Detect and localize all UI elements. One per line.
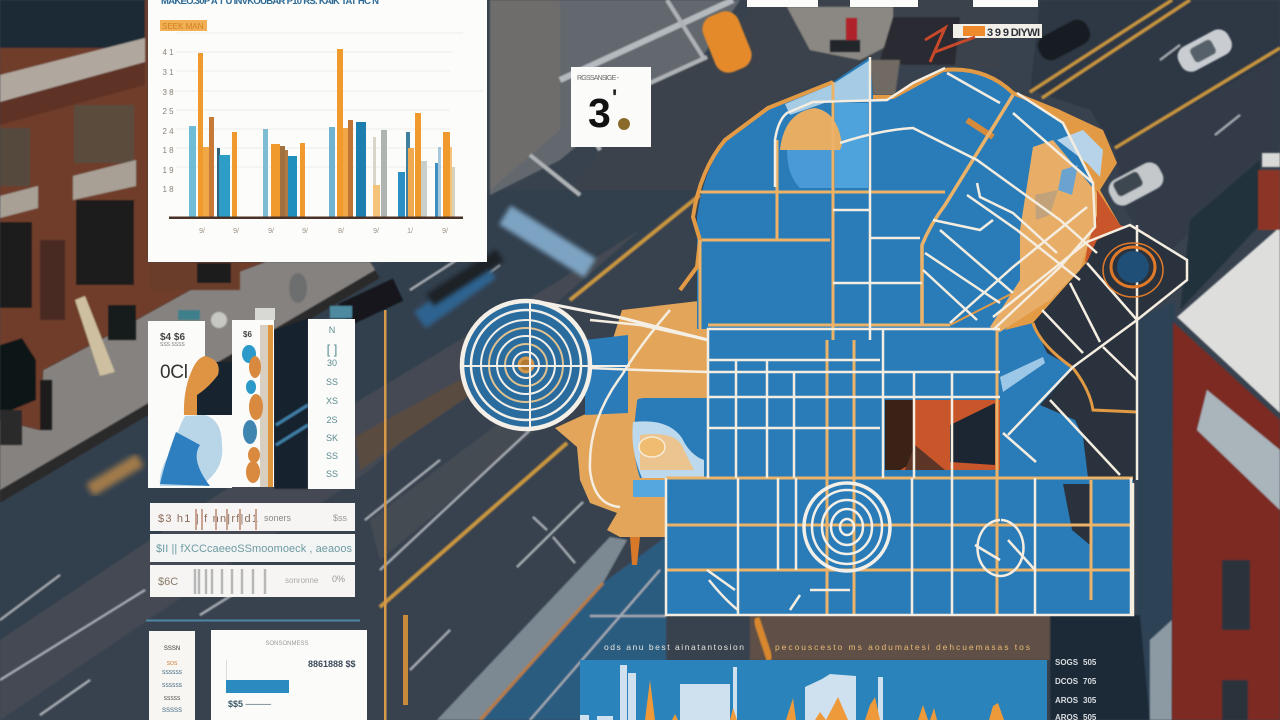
row 3: sonronne [285,576,319,585]
row 1: $ss [333,513,348,523]
blue bar [226,680,289,693]
x axis labels: 9/ [233,228,239,235]
orange vertical bar [403,615,408,705]
legend tag: SEEK MAN [162,22,204,31]
x axis labels: 9/ [302,228,308,235]
panel: illustration card B [232,308,275,487]
panel: icon list card C: SS [326,377,338,387]
map: street lines white [590,57,1187,615]
row 1: $3 h1 | f nn|rf|d1 [158,513,258,525]
x axis labels: 9/ [442,228,448,235]
map: district street map [462,57,1187,615]
map: bullseye target bottom [804,483,890,571]
x axis labels: 9/ [373,228,379,235]
panel: illustration card A: SSS SSSS [160,342,185,348]
panel: icon list card C: SS [326,451,338,461]
bottom chart side labels [1055,658,1097,720]
street furniture [339,278,404,326]
orange vertical marker line [384,310,386,720]
y axis labels: 1 8 [162,185,174,194]
map: red-orange district block [885,400,1000,470]
panel: icon list card C: [ ] [327,342,337,357]
bottom chart side labels: 505 [1083,658,1097,667]
row 1: soners [264,513,292,523]
y axis labels [162,48,174,194]
panel: bottom left card: SSSSS [164,696,181,702]
bottom chart side labels: AROS [1055,696,1079,705]
x axis labels [199,228,448,235]
callout: number 3: RGSSANSIGE - [577,75,620,82]
bottom chart side labels: DCOS [1055,677,1079,686]
x axis labels: 9/ [268,228,274,235]
right red brick building [1172,153,1280,720]
white car lower [1105,158,1167,210]
left brick building [0,0,265,445]
white car upper [1174,25,1236,76]
map: dark scrap in lower grid [1063,484,1090,545]
bottom chart heading band: pecouscesto ms aodumatesi dehcuemasas tos [775,642,1030,652]
bottom chart heading band [604,618,1030,660]
map: street lines orange [666,69,1137,615]
y axis labels: 3 1 [162,68,174,77]
map: side blue panel beneath target [585,335,628,415]
panel: bottom left card: SSSSS [162,708,182,714]
y axis labels: 2 5 [162,107,174,116]
blue shape [160,415,222,486]
row 3: 0% [332,574,345,584]
map: pale blue patches [632,60,1103,497]
divider [146,620,360,622]
grey sidewalk bottom [437,537,627,720]
bottom chart heading band: ods anu best ainatantosion [604,642,744,652]
y axis labels: 1 9 [162,166,174,175]
callout: number 3: 3 [588,90,611,136]
panel: illustration card A: 0Cl [160,362,188,383]
row 1 [150,503,355,531]
road markings [380,195,700,607]
x axis labels: 1/ [407,228,413,235]
bars [189,49,455,218]
panel: bottom summary card: SONSONMESS [265,641,309,647]
gridlines [160,33,483,167]
callout: number 3 [571,67,651,147]
y axis labels: 2 4 [162,127,174,136]
table rows [150,503,355,597]
panel: bottom area chart [580,660,1047,720]
map: blue district fill [666,57,1133,615]
map: small target right [1103,243,1163,297]
orange car [698,7,756,77]
cars on the road [698,7,1236,210]
sidewalk left [0,262,375,490]
x axis labels: 8/ [338,228,344,235]
panel: icon list card C: XS [326,396,338,406]
baseline [169,216,463,219]
panel: bottom left card: SSSSSS [162,683,183,689]
panel: bottom left card [149,631,195,720]
decorative red frame by tag [925,28,975,62]
panel: illustration card A [148,321,232,488]
x axis labels: 9/ [199,228,205,235]
panel: bar chart [148,0,487,262]
panel: icon list card C: SS [326,469,338,479]
y axis labels: 1 8 [162,146,174,155]
panel: icon list card C: N [329,325,335,335]
bottom chart side labels: 705 [1083,677,1097,686]
top tags [747,0,1038,7]
row 2 [150,534,355,562]
map: orange underlay [555,93,1150,565]
map: bullseye target left [462,300,708,430]
panel: bottom left card: SSSN [164,646,180,652]
cyclist [830,18,860,52]
map: dark wedge behind street grid [1033,225,1187,480]
label: orange tag: 3 9 9 DIYWI [987,27,1040,39]
pale bars [580,665,883,720]
y axis labels: 3 8 [162,88,174,97]
orange blob [184,356,219,415]
panel: bottom left card: SOS [167,661,178,667]
dark car [1034,16,1094,64]
row 3 [150,565,355,597]
panel: icon list card C: 30 [327,358,337,368]
panel: bottom left card: SSSSSS [162,670,183,676]
y axis labels: 4 1 [162,48,174,57]
label: orange tag [953,24,1042,39]
panel: icon list card C: 2S [326,415,338,425]
panel: icon list card C [308,319,355,489]
map: orange district patches [780,108,1097,332]
bottom chart side labels: 305 [1083,696,1097,705]
row 3: $6C [158,576,178,588]
panel: bottom summary card: $$5 ──── [228,699,272,709]
panel: bottom summary card [211,630,367,720]
row 2: $II || fXCCcaeeoSSmoomoeck , aeaoos [156,543,352,555]
orange spikes [645,680,1004,720]
dark gap between cards [274,318,308,489]
panel: bottom summary card: 8861888 $$ [308,659,356,669]
bottom chart side labels: SOGS [1055,658,1079,667]
callout: number 3: ' [612,85,617,110]
panel: icon list card C: SK [326,433,338,443]
panel: illustration card A: $4 $6 [160,332,185,343]
panel: illustration card B: $6 [243,330,252,339]
dark patch [197,362,232,415]
